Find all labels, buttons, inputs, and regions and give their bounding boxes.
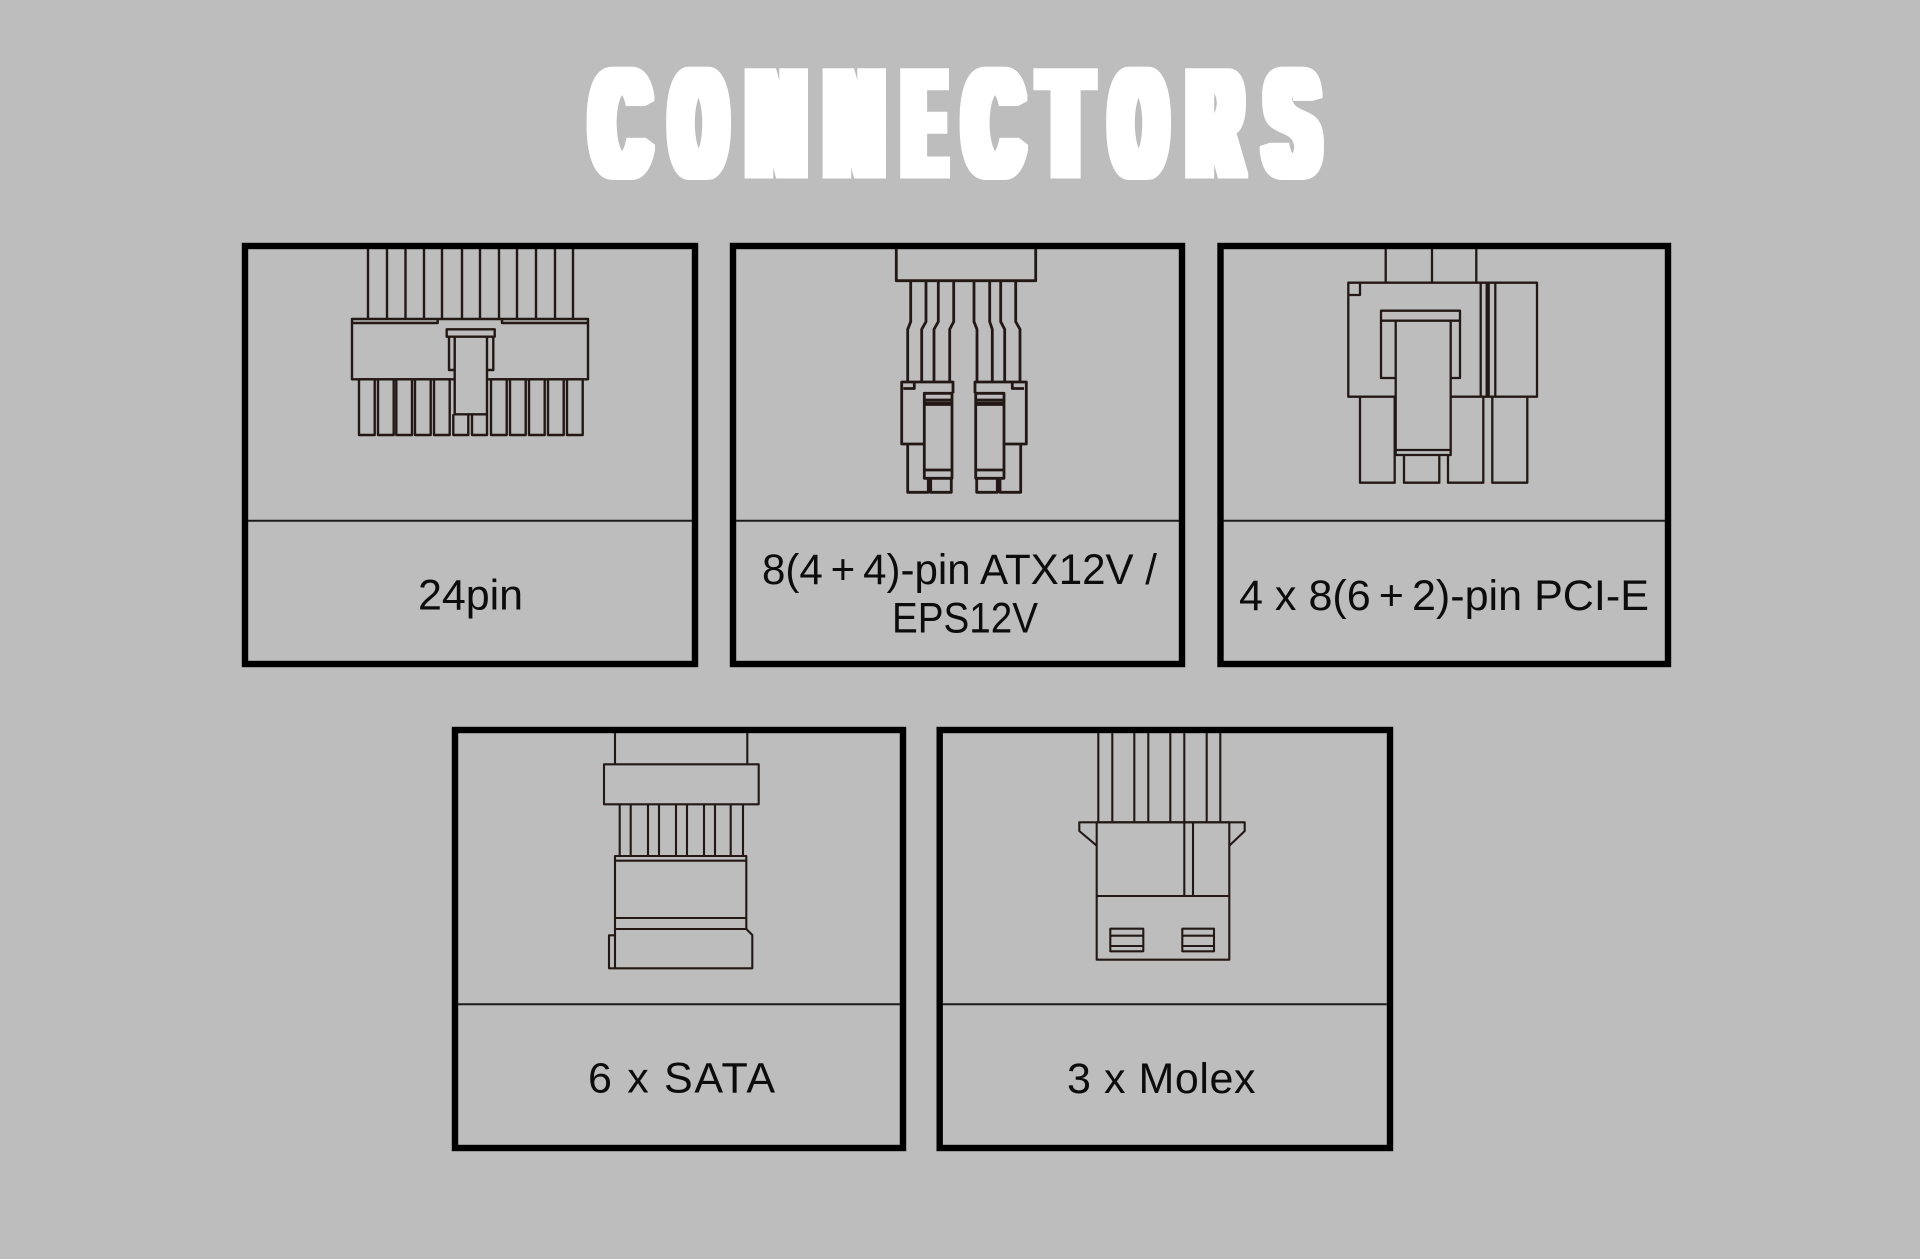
- label: 8(4+4)-pin ATX12V / EPS12V: 8(4+4)-pin ATX12V /: [762, 546, 1157, 594]
- title: T: [1042, 38, 1089, 208]
- icon: 8-pin connector: [896, 249, 1036, 492]
- label: 8(4+4)-pin ATX12V / EPS12V: [762, 546, 1157, 643]
- title: [586, 38, 1324, 208]
- panel: ATX12V / EPS12V: [733, 246, 1182, 664]
- label: 24pin: 24pin: [418, 572, 523, 620]
- icon: Molex connector: [1079, 733, 1245, 960]
- label: 4 x 8(6+2)-pin PCI-E: 4 x 8(6+2)-pin PCI-E: [1239, 572, 1649, 620]
- panel: 24pin: [245, 246, 695, 664]
- title: O: [1112, 38, 1164, 208]
- title: R: [1190, 38, 1240, 208]
- title: E: [906, 38, 943, 208]
- icon: SATA connector: [604, 733, 759, 968]
- title: C: [593, 38, 648, 208]
- title: N: [749, 38, 803, 208]
- icon: 24-pin connector: [352, 249, 588, 435]
- label: 6 x SATA: 6 x SATA: [588, 1055, 775, 1103]
- title: O: [673, 38, 724, 208]
- panel: Molex: [940, 730, 1390, 1148]
- panel: PCI-E: [1220, 246, 1668, 664]
- title: S: [1267, 38, 1317, 208]
- label: 3 x Molex: 3 x Molex: [1067, 1055, 1256, 1103]
- title: C: [966, 38, 1021, 208]
- icon: PCI-E connector: [1348, 249, 1537, 483]
- panel: SATA: [455, 730, 903, 1148]
- title: N: [827, 38, 881, 208]
- label: 8(4+4)-pin ATX12V / EPS12V: EPS12V: [892, 595, 1038, 643]
